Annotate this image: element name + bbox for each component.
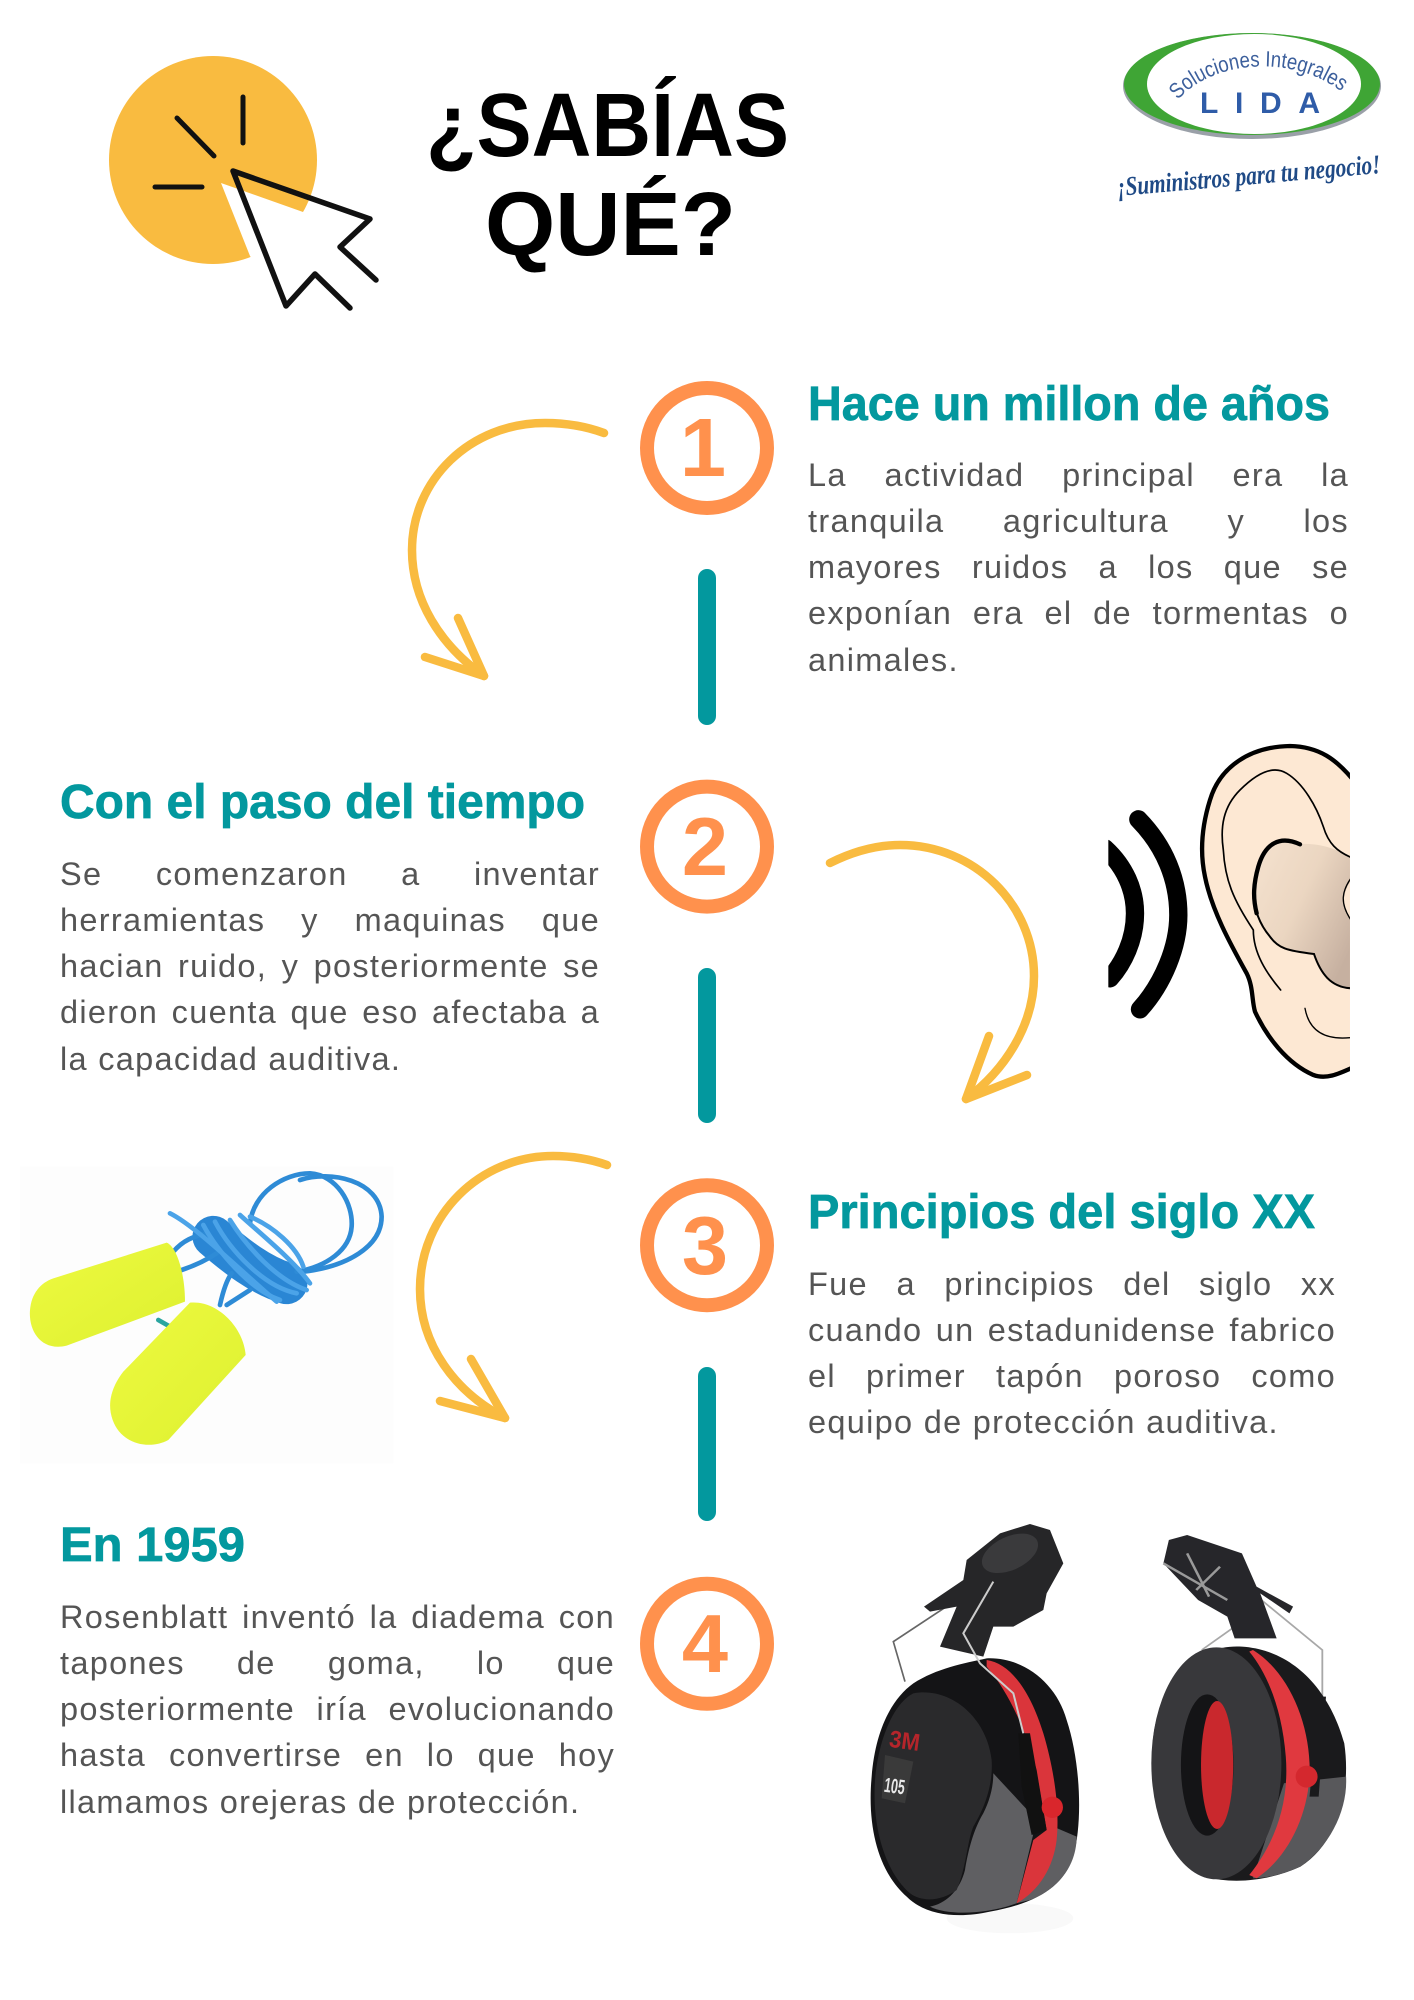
arrow: step 1 to step 2	[412, 423, 604, 676]
number badge 4	[647, 1584, 767, 1704]
heading: En 1959: En 1959	[60, 1519, 245, 1572]
text block: Principios del siglo XX: equipo de protección auditiva.	[808, 1404, 1279, 1440]
number badge 3	[647, 1185, 767, 1305]
heading: Hace un millon de años: Hace un millon de años	[808, 378, 1330, 431]
title	[426, 75, 789, 275]
logo: Soluciones Integrales LIDA: LIDA	[1200, 87, 1320, 120]
logo: Soluciones Integrales LIDA: Soluciones Integrales	[1170, 51, 1346, 98]
text block: En 1959: llamamos orejeras de protección.	[60, 1784, 580, 1820]
number badge 1: 1	[680, 401, 726, 494]
illustration: ear with sound waves	[1105, 746, 1353, 1077]
text block: Con el paso del tiempo: herramientas y maquinas que	[60, 902, 600, 938]
text block: Hace un millon de años: exponían era el de tormentas o	[808, 595, 1349, 631]
text block: Hace un millon de años: La actividad principal era la	[808, 457, 1349, 493]
text block: Hace un millon de años: mayores ruidos a los que se	[808, 549, 1349, 585]
text block: Con el paso del tiempo: Se comenzaron a inventar	[60, 856, 600, 892]
text block: Hace un millon de años: animales.	[808, 642, 959, 678]
text block: Con el paso del tiempo: la capacidad auditiva.	[60, 1041, 401, 1077]
text block: Hace un millon de años: tranquila agricultura y los	[808, 503, 1349, 539]
text block: En 1959: tapones de goma, lo que	[60, 1645, 615, 1681]
logo: Soluciones Integrales LIDA	[1116, 33, 1382, 202]
heading: Principios del siglo XX: Principios del siglo XX	[808, 1186, 1315, 1239]
text block: Principios del siglo XX: Fue a principios del siglo xx	[808, 1266, 1336, 1302]
text block: Principios del siglo XX: el primer tapón poroso como	[808, 1358, 1336, 1394]
heading: Con el paso del tiempo: Con el paso del tiempo	[60, 776, 585, 829]
text block: Principios del siglo XX	[808, 1266, 1336, 1440]
title: QUÉ?	[485, 174, 736, 275]
left earmuff with 3M label: 105	[883, 1774, 906, 1799]
number badge 3: 3	[682, 1199, 728, 1292]
right earmuff showing cushion	[1151, 1535, 1346, 1881]
text block: Hace un millon de años	[808, 457, 1349, 678]
text block: Con el paso del tiempo	[60, 856, 600, 1077]
connector bar 1	[698, 569, 716, 725]
text block: Con el paso del tiempo: hacian ruido, y posteriormente se	[60, 948, 600, 984]
connector bar 2	[698, 968, 716, 1123]
text block: En 1959: hasta convertirse en lo que hoy	[60, 1737, 615, 1773]
photo: foam earplugs with blue cord	[20, 1167, 393, 1463]
connector bar 3	[698, 1367, 716, 1521]
icon: click cursor	[109, 56, 400, 320]
title: ¿SABÍAS	[426, 75, 789, 176]
arrow: step 2 to step 3	[830, 845, 1034, 1099]
text block: En 1959: posteriormente iría evolucionando	[60, 1691, 615, 1727]
number badge 2	[647, 787, 767, 907]
left earmuff with 3M label	[871, 1524, 1079, 1933]
number badge 4: 4	[682, 1597, 728, 1690]
number badge 1	[647, 388, 767, 508]
text block: Principios del siglo XX: cuando un estadunidense fabrico	[808, 1312, 1336, 1348]
text block: En 1959: Rosenblatt inventó la diadema con	[60, 1599, 615, 1635]
text block: En 1959	[60, 1599, 615, 1820]
photo: red and black earmuffs	[871, 1524, 1346, 1933]
text block: Con el paso del tiempo: dieron cuenta que eso afectaba a	[60, 994, 600, 1030]
number badge 2: 2	[682, 800, 728, 893]
arrow: step 3 to step 4	[420, 1156, 607, 1418]
left earmuff with 3M label: 3M	[887, 1726, 922, 1757]
